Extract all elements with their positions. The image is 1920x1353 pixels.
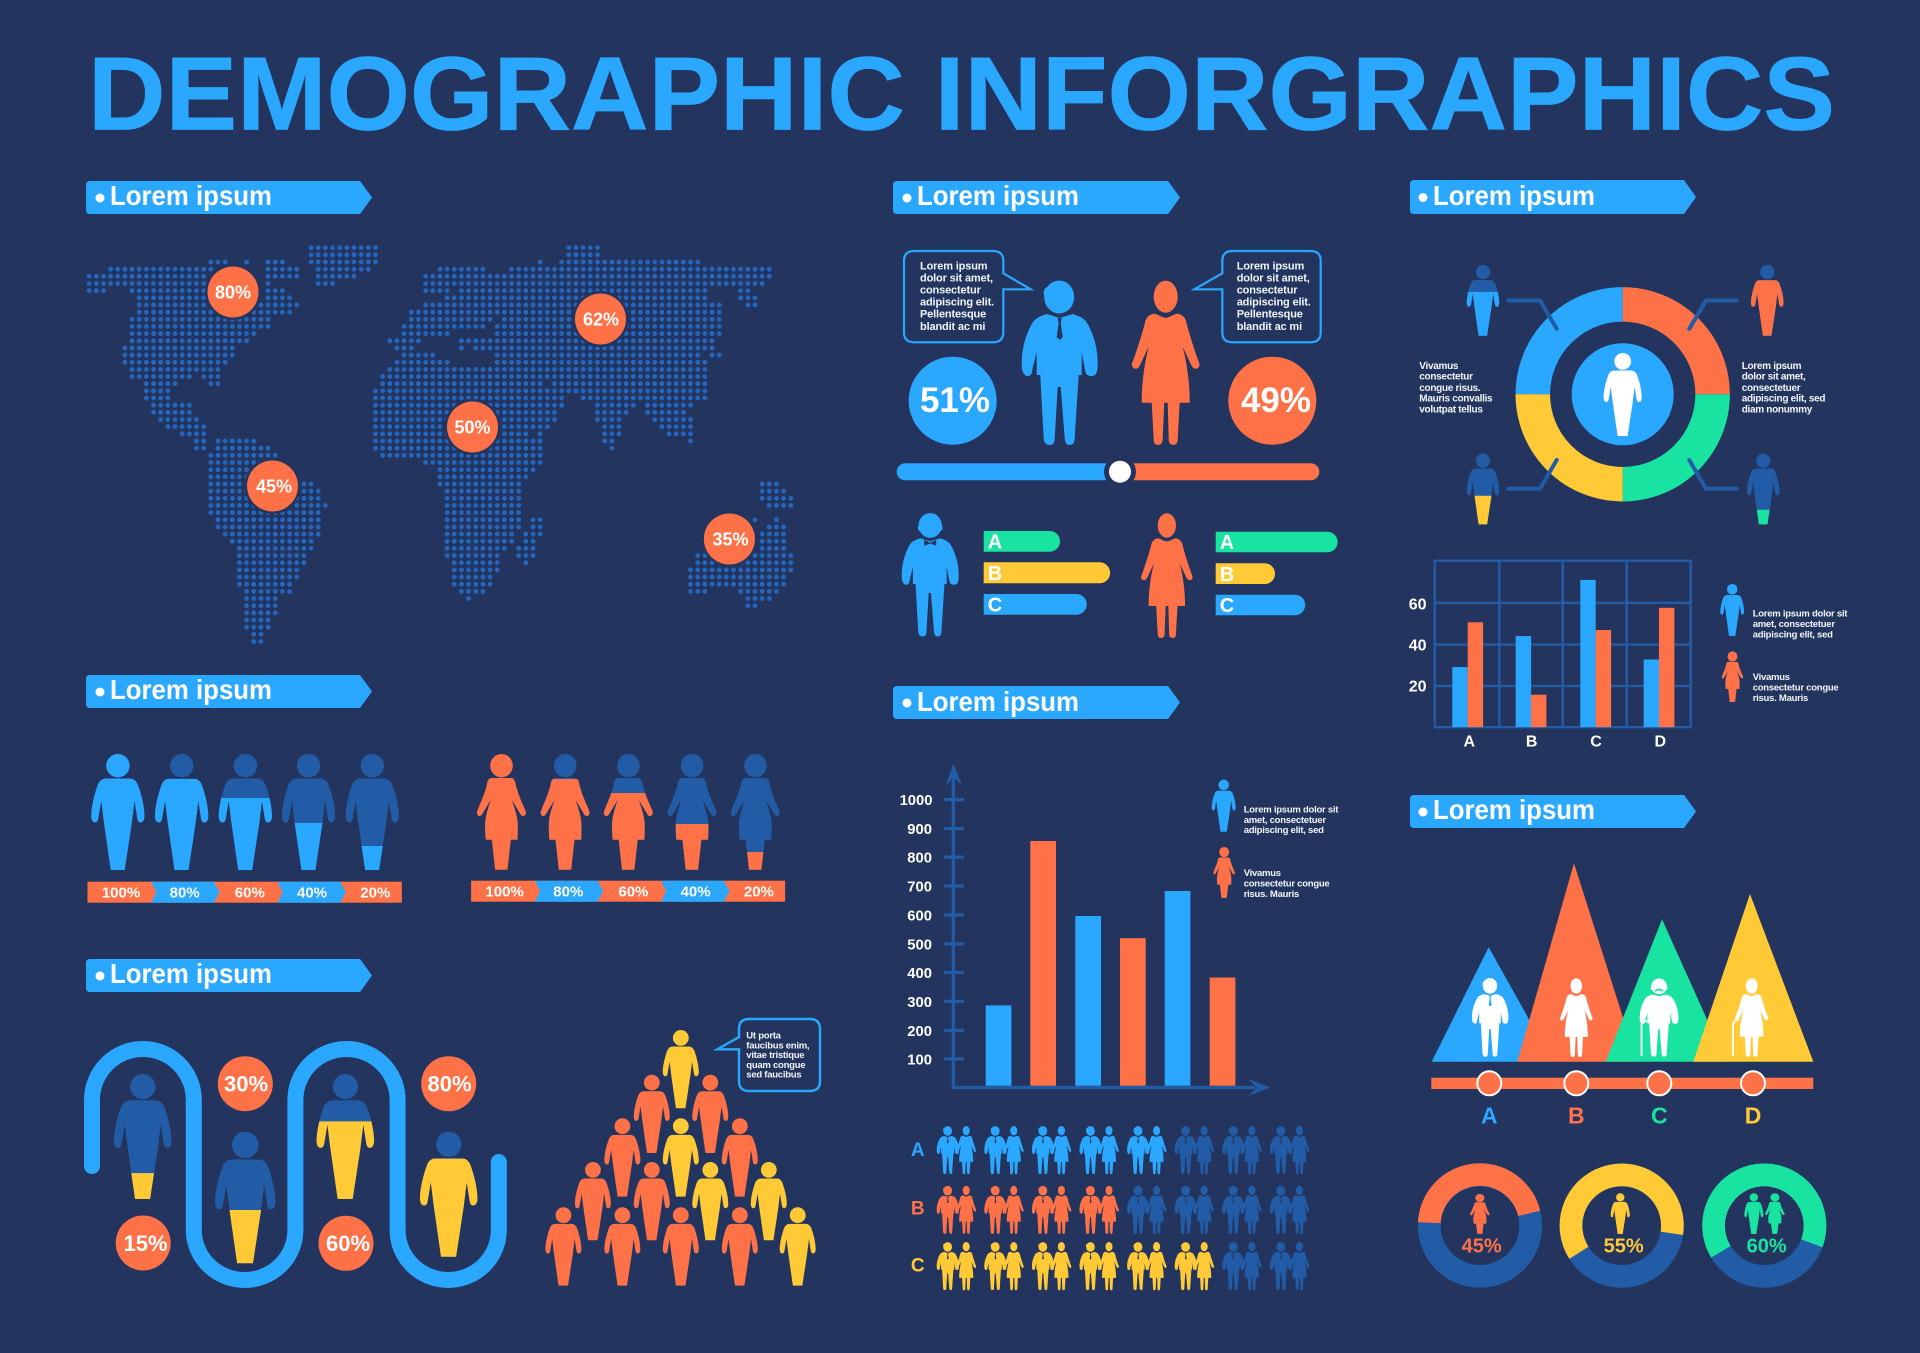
legend: male: adipiscing elit, sed [1244,825,1324,836]
icon: woman [1132,281,1200,445]
speech bubble: female [1194,251,1321,342]
axis labels: 600 [907,908,932,924]
percent strip right: 100% [485,884,524,900]
panel: age triangles [1410,794,1815,1276]
text: ring left: Vivamus [1419,361,1459,372]
axis labels: 100 [907,1052,932,1068]
speech bubble: male [904,251,1031,342]
couples row C: C [911,1255,925,1276]
person 30% [215,1132,275,1263]
person: bottom left [1467,454,1499,524]
text: ring right: diam nonummy [1742,405,1813,416]
timeline labels: A [1481,1103,1498,1129]
speech bubble: female: Lorem ipsum [1237,260,1304,272]
marker 50%: 50% [454,418,491,438]
marker 62% [575,294,626,344]
legend: male: Lorem ipsum dolor sit [1244,804,1339,816]
timeline labels: B [1568,1103,1585,1129]
person 15% [114,1074,171,1199]
panel: gender split [893,180,1338,638]
icon: businessman [1472,978,1508,1057]
slider [897,456,1319,488]
speech bubble: pyramid: sed faucibus [746,1070,801,1080]
stat 49%: 49% [1241,381,1311,420]
speech bubble: pyramid [717,1019,820,1091]
grouped bar chart: A [1464,734,1476,751]
speech bubble: female: consectetur [1237,284,1298,296]
heading: ring diagram [1410,180,1696,214]
legend: female: Vivamus [1244,868,1281,879]
percent strip left: 80% [170,884,200,902]
male bars [984,531,1110,616]
stat 49% [1228,357,1316,445]
legend: male [1720,584,1848,640]
legend: male: Lorem ipsum dolor sit [1753,609,1848,620]
person: top right [1751,265,1784,336]
heading: world map [86,180,372,214]
heading: gender split [893,180,1180,214]
percent strip right: 40% [681,884,711,900]
axis labels: 1000 [900,793,932,809]
badge 15% [116,1216,171,1270]
donut 45%: 45% [1462,1236,1502,1258]
speech bubble: female: dolor sit amet, [1237,272,1310,284]
heading: age triangles [1410,794,1696,828]
dotted world map [89,248,791,641]
connector lines [1508,300,1737,489]
percent strip left [88,882,402,903]
grouped bar chart: 40 [1409,637,1427,654]
text: ring left: consectetur [1419,372,1473,383]
female bars [1216,532,1338,617]
legend: female: Vivamus [1753,672,1790,683]
speech bubble: female: Pellentesque [1237,309,1303,321]
grouped bar chart [1409,561,1691,751]
couples row B: B [911,1198,925,1219]
grouped bar chart: C [1590,734,1602,751]
female bars: A [1220,532,1234,554]
axis labels: 700 [907,880,932,896]
badge 60%: 60% [326,1231,370,1256]
couples row C [911,1242,1309,1290]
person 80% [420,1132,477,1257]
donut 55% [1571,1175,1672,1276]
axis labels: 400 [907,966,932,982]
axes [944,764,1271,1096]
speech bubble: pyramid: quam congue [746,1060,805,1071]
heading: world map: Lorem ipsum [110,180,272,211]
panel: ring diagram [1409,180,1848,751]
female bars: B [1220,564,1234,586]
speech bubble: female: blandit ac mi [1237,321,1302,333]
legend: female [1722,651,1838,704]
legend: female: consectetur congue [1753,682,1838,694]
title: DEMOGRAPHIC INFORGRAPHICS [88,36,1835,152]
person: bottom right [1747,454,1780,524]
axis labels: 900 [907,822,932,838]
percent strip right: 60% [618,884,648,900]
percent strip left: 20% [360,884,390,902]
couples row A: A [911,1140,925,1161]
timeline [1431,1071,1813,1095]
panel: wave and pyramid [86,958,820,1286]
marker 45% [247,460,298,512]
badge 30%: 30% [224,1072,268,1096]
heading: bar chart: Lorem ipsum [917,686,1079,717]
panel: fill level people [86,674,785,903]
marker 80%: 80% [215,282,251,302]
icon: old man with cane [1640,979,1678,1057]
percent strip left: 60% [235,884,265,902]
donut 60% [1714,1175,1815,1276]
person: top left [1467,265,1499,336]
marker 62%: 62% [583,310,619,330]
text: ring left: volutpat tellus [1419,405,1483,416]
panel: world map [86,180,791,642]
timeline labels: C [1651,1103,1668,1129]
axis labels: 300 [907,995,932,1011]
stat 51%: 51% [920,381,990,420]
percent strip right [471,881,785,902]
donut 60%: 60% [1747,1236,1787,1258]
couples row B [911,1186,1309,1234]
female bars: C [1220,595,1234,617]
badge 30% [218,1056,273,1111]
percent strip left: 100% [102,884,140,902]
marker 80% [208,266,258,318]
timeline labels [1481,1103,1761,1129]
male bars: C [988,594,1002,616]
heading: fill level people: Lorem ipsum [110,674,272,705]
text: ring right: Lorem ipsum [1742,361,1802,372]
legend: female: risus. Mauris [1753,693,1808,704]
wavy tube [92,1049,499,1280]
text: ring right [1742,361,1825,416]
couples row A [911,1126,1309,1174]
marker 35% [704,514,755,564]
legend: male: amet, consectetuer [1753,619,1835,630]
panel: bar chart [893,686,1339,1290]
speech bubble: male: Pellentesque [920,309,986,321]
text: ring left: Mauris convallis [1419,394,1493,404]
badge 80%: 80% [427,1072,472,1096]
donut 45% [1429,1175,1531,1276]
donut ring [1533,304,1713,484]
heading: wave and pyramid: Lorem ipsum [110,958,272,989]
percent strip right: 80% [553,884,583,900]
legend: female [1213,847,1329,900]
speech bubble: pyramid: vitae tristique [746,1050,804,1061]
marker 45%: 45% [256,476,292,496]
ring centre person [1572,343,1674,445]
percent strip left: 40% [297,884,327,902]
grouped bar chart: D [1655,734,1666,751]
heading: ring diagram: Lorem ipsum [1433,180,1595,211]
bars [986,841,1235,1086]
grouped bar chart: B [1526,734,1537,751]
speech bubble: pyramid: Ut porta [746,1030,782,1042]
icon: woman [1560,978,1593,1057]
icon: old woman with cane [1733,978,1768,1057]
text: ring right: adipiscing elit, sed [1742,394,1825,404]
text: ring left: congue risus. [1419,383,1481,394]
triangles [1432,863,1813,1062]
grouped bar chart: 60 [1409,596,1427,613]
heading: bar chart [893,686,1180,719]
person 60% [317,1074,374,1199]
axis labels [900,793,932,1068]
icon: small woman [1141,513,1193,638]
text: ring left [1419,361,1493,416]
text: ring right: consectetuer [1742,383,1801,394]
timeline labels: D [1745,1103,1761,1129]
marker 35%: 35% [712,530,749,550]
blue people row [91,754,399,870]
legend: female: consectetur congue [1244,878,1329,889]
male bars: B [988,563,1002,585]
heading: fill level people [86,674,372,708]
grouped bar chart: 20 [1409,679,1427,696]
marker 50% [447,402,498,452]
legend: female: risus. Mauris [1244,889,1299,900]
speech bubble: male: consectetur [920,284,982,296]
heading: wave and pyramid [86,958,372,992]
icon: man [1022,280,1098,445]
legend: male: amet, consectetuer [1244,815,1326,826]
orange people row [477,754,780,870]
male bars: A [988,532,1002,554]
speech bubble: female: adipiscing elit. [1237,297,1311,309]
text: ring right: dolor sit amet, [1742,372,1806,383]
icon: small man [902,513,959,636]
axis labels: 500 [907,938,932,954]
speech bubble: male: dolor sit amet, [920,272,993,284]
axis labels: 200 [907,1024,932,1040]
speech bubble: pyramid: faucibus enim, [746,1040,809,1051]
speech bubble: male: blandit ac mi [920,321,985,333]
legend: male: adipiscing elit, sed [1753,629,1833,640]
badge 80% [421,1056,476,1111]
badge 60% [318,1216,374,1271]
stat 51% [909,357,997,445]
legend: male [1212,780,1339,836]
donut 55%: 55% [1604,1236,1644,1258]
speech bubble: male: Lorem ipsum [920,260,988,272]
percent strip right: 20% [744,884,774,900]
heading: age triangles: Lorem ipsum [1433,794,1595,825]
axis labels: 800 [907,850,932,866]
speech bubble: male: adipiscing elit. [920,297,994,309]
people pyramid [545,1030,816,1286]
heading: gender split: Lorem ipsum [917,180,1079,211]
badge 15%: 15% [123,1231,168,1256]
